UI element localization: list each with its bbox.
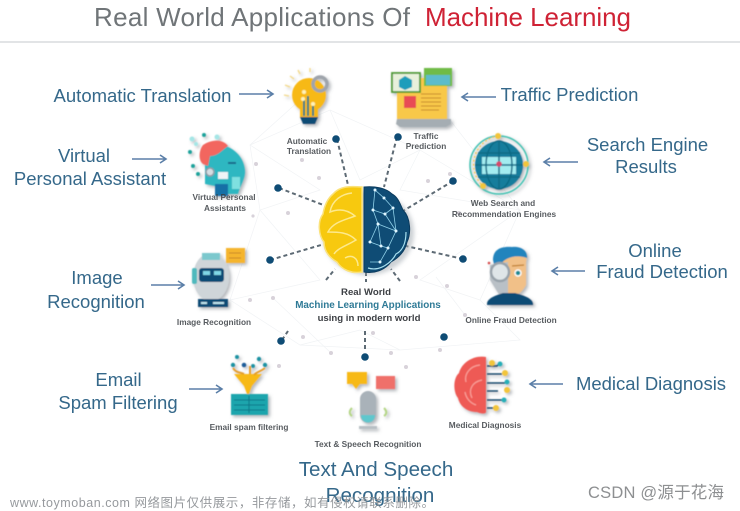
heading: image recognition: [47, 267, 145, 312]
label: medical diagnosis: Medical Diagnosis: [449, 420, 522, 430]
text: Assistants: [204, 203, 246, 213]
label: traffic prediction: Traffic: [414, 131, 439, 141]
left yellow hemisphere: [319, 187, 362, 273]
heading: text and speech recognition: Recognition: [326, 484, 434, 507]
heading: text and speech recognition: Text And Speech: [299, 458, 453, 481]
icon: microphone with speech bubbles: [347, 372, 395, 429]
heading: search engine results: Search Engine: [587, 134, 708, 155]
arrow: search engine: [544, 158, 578, 166]
heading: email spam filtering: [58, 369, 178, 413]
central brain: [319, 187, 414, 275]
heading: image recognition: Image: [71, 267, 123, 288]
arrow: traffic prediction: [462, 93, 496, 101]
heading: search engine results: Results: [615, 156, 677, 177]
text: Prediction: [406, 141, 446, 151]
central caption: using in modern world: [318, 313, 421, 324]
title: Machine Learning: [425, 2, 631, 32]
heading: medical diagnosis: Medical Diagnosis: [576, 373, 726, 394]
arrow: image recognition: [151, 281, 184, 289]
central caption: Real World: [341, 287, 391, 298]
heading: virtual personal assistant: [14, 145, 166, 189]
heading: email spam filtering: Spam Filtering: [58, 392, 178, 413]
icon: light bulb with gear: [284, 68, 327, 124]
icon: funnel and server: [231, 355, 268, 415]
label: online fraud detection: Online Fraud Detection: [465, 315, 557, 325]
label: image recognition: Image Recognition: [177, 317, 251, 327]
arrow: email spam filtering: [189, 385, 222, 393]
label: text and speech recognition: Text & Speech Recognition: [315, 439, 421, 449]
label: web search: Web Search and: [471, 198, 535, 208]
watermark: author: CSDN @源于花海: [588, 483, 724, 502]
icon: globe: [470, 133, 529, 194]
arrow: medical diagnosis: [530, 380, 563, 388]
heading: online fraud detection: Online: [628, 240, 682, 261]
icon: robot: [192, 248, 245, 307]
heading: virtual personal assistant: Personal Assistant: [14, 168, 166, 189]
heading: online fraud detection: [596, 240, 728, 282]
heading: traffic prediction: Traffic Prediction: [501, 84, 638, 105]
title: Real World Applications Of: [94, 2, 411, 32]
icon: medical brain: [454, 357, 510, 414]
arrow: online fraud detection: [552, 267, 585, 275]
icon: virtual assistant head: [188, 133, 245, 196]
arrow: automatic translation: [239, 90, 273, 98]
watermark: source site: www.toymoban.com 网络图片仅供展示，非存储，如有侵权请联系删除。: [9, 495, 434, 510]
heading: automatic translation: Automatic Translation: [54, 85, 231, 106]
dashed connectors: [266, 133, 467, 361]
label: email spam filtering: Email spam filtering: [210, 422, 288, 432]
heading: virtual personal assistant: Virtual: [58, 145, 110, 166]
icon: fraud detection face: [487, 247, 533, 305]
heading: text and speech recognition: [299, 458, 453, 507]
text: Recommendation Engines: [452, 209, 556, 219]
heading: online fraud detection: Fraud Detection: [596, 261, 728, 282]
text: Translation: [287, 146, 331, 156]
central caption: Machine Learning Applications: [295, 300, 441, 311]
label: automatic translation: Automatic: [287, 136, 328, 146]
icon: traffic prediction: [392, 68, 452, 127]
right blue hemisphere: [364, 187, 410, 273]
heading: search engine results: [587, 134, 708, 177]
arrow: virtual personal assistant: [132, 155, 166, 163]
heading: image recognition: Recognition: [47, 291, 145, 312]
title: [94, 2, 631, 32]
label: virtual personal assistants: Virtual Personal: [192, 192, 256, 202]
heading: email spam filtering: Email: [95, 369, 142, 390]
central caption: [295, 287, 441, 324]
